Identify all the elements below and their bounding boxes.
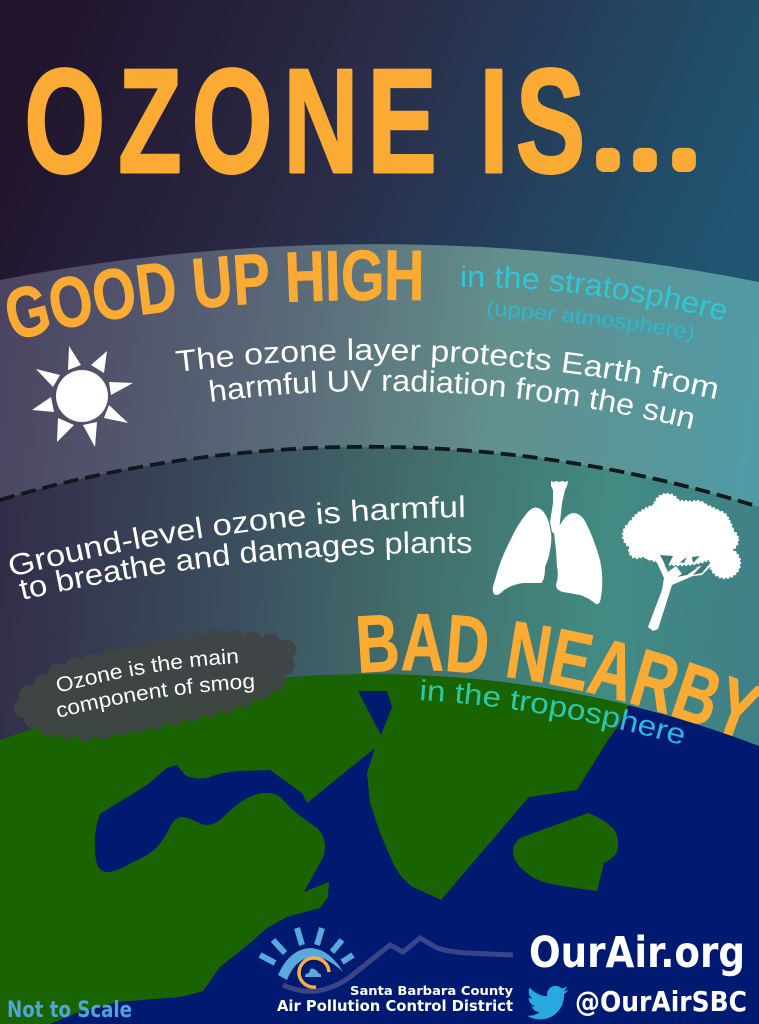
icon: lungs <box>493 481 602 604</box>
text: ground-level ozone: Ground-level ozone is harmful <box>10 495 464 574</box>
logo: Santa Barbara County APCD <box>260 928 513 1015</box>
label: not to scale: Not to Scale <box>7 998 132 1023</box>
text: smog note: component of smog <box>57 677 254 717</box>
text: smog note: Ozone is the main <box>56 648 238 692</box>
label: in the stratosphere: in the stratosphere <box>462 265 726 320</box>
label: upper atmosphere: (upper atmosphere) <box>488 300 693 343</box>
earth: island <box>513 813 618 891</box>
title: ... <box>600 114 692 176</box>
logo dome <box>278 948 343 980</box>
smog cloud <box>14 629 296 742</box>
logo cloud <box>305 968 321 977</box>
text: smog note <box>56 648 254 717</box>
earth: main land mass <box>0 674 629 1024</box>
logo orange arc <box>299 958 329 987</box>
icon: twitter bird <box>527 986 568 1019</box>
logo text <box>277 983 513 1015</box>
logo text: Air Pollution Control District <box>277 997 513 1015</box>
text: ground-level ozone: to breathe and damages plants <box>19 531 472 599</box>
logo rays <box>260 928 353 963</box>
logo mountains <box>283 938 513 991</box>
panel: stratosphere band <box>0 244 759 1024</box>
text: ozone layer protects: harmful UV radiation from the sun <box>210 370 693 429</box>
earth: ocean <box>0 674 759 1024</box>
heading: good up high: GOOD UP HIGH <box>6 250 422 338</box>
earth: inlet <box>358 691 392 735</box>
title: OZONE IS <box>24 39 585 204</box>
text: ozone layer protects: The ozone layer protects Earth from <box>175 338 717 399</box>
panel: troposphere band <box>0 447 759 1024</box>
icon: tree <box>623 494 740 631</box>
label: in the troposphere: in the troposphere <box>421 679 684 744</box>
icon: sun <box>32 346 133 447</box>
dashed boundary line <box>0 447 759 507</box>
logo text: Santa Barbara County <box>350 983 513 998</box>
